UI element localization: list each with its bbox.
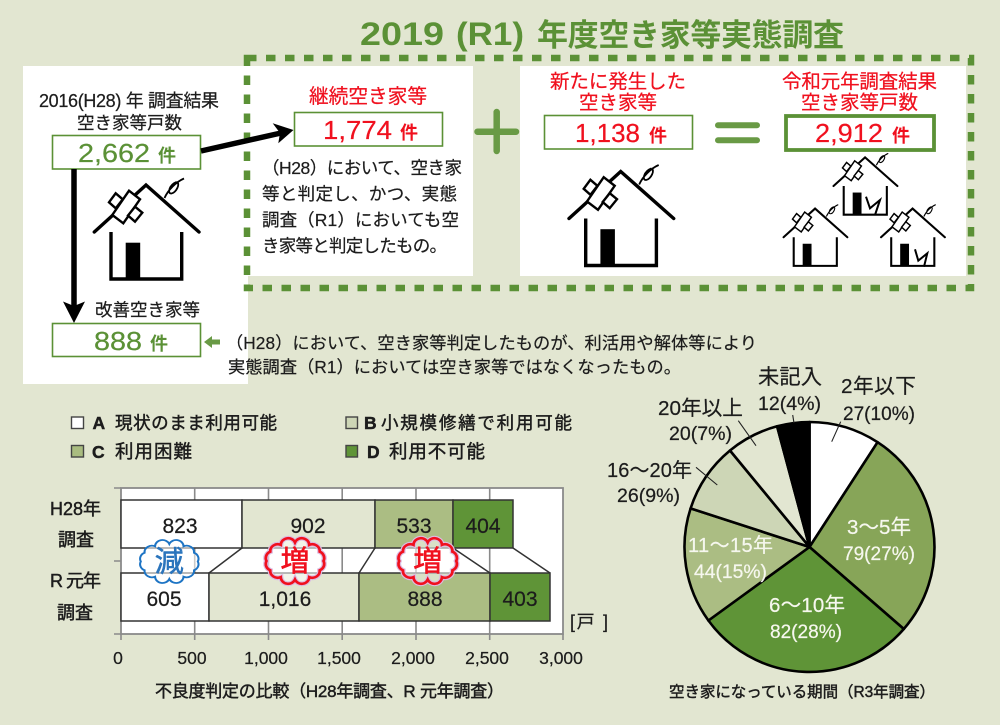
bars: H28 survey: [121, 500, 513, 548]
values: R1 survey: 1,016: [259, 588, 311, 611]
arrow: small green: [204, 336, 220, 348]
label: over 20 years: 20年以上: [658, 397, 743, 420]
connector lines: [209, 548, 550, 573]
slice: 2 years or less: [810, 422, 878, 547]
arrow: to improved vacant houses: [63, 169, 85, 323]
equals sign: [718, 125, 757, 140]
text: continued explanation: 等と判定し、かつ、実態: [262, 184, 457, 204]
title: 2019: [360, 16, 444, 52]
x axis labels: 2,500: [465, 648, 509, 668]
callout: increase: 増: [413, 545, 442, 578]
label: not stated: [758, 365, 822, 415]
slice: not stated: [777, 422, 810, 547]
unit label: [戸 ]: [570, 612, 608, 632]
chart caption: 不良度判定の比較（H28年調査、R 元年調査）: [155, 682, 504, 701]
legend item D: D: [367, 442, 380, 462]
legend item A: 現状のまま利用可能: [115, 413, 277, 433]
leader lines: [696, 415, 841, 485]
text: improved explanation: [226, 333, 757, 377]
box: 2,662: 2,662: [78, 138, 150, 168]
label: 3-5 years: 79(27%): [843, 544, 915, 565]
plus sign: [478, 112, 516, 151]
label: 2 years or less: 27(10%): [843, 404, 915, 425]
label: 11-15 years: 11～15年: [688, 534, 773, 557]
values: R1 survey: [146, 588, 538, 611]
text: continued explanation: [262, 158, 462, 256]
box: 2,912: [786, 116, 934, 150]
values: R1 survey: 888: [407, 588, 443, 611]
label: 16-20 years: 26(9%): [617, 486, 680, 507]
x axis labels: [113, 648, 583, 668]
legend item C: [72, 441, 192, 462]
box: 2,912: 件: [892, 126, 910, 146]
text: continued explanation: （H28）において、空き家: [262, 158, 462, 178]
label: 2 years or less: [841, 375, 916, 425]
title: 年度空き家等実態調査: [537, 18, 844, 53]
values: H28 survey: [162, 515, 501, 538]
y axis labels: R 元年: [50, 571, 101, 591]
y axis labels: 調査: [57, 603, 93, 623]
text: continued explanation: 調査（R1）においても空: [262, 210, 459, 230]
arrow: to continued vacant houses: [201, 123, 294, 151]
title: (R1): [456, 16, 524, 52]
pie caption: 空き家になっている期間（R3年調査）: [669, 683, 935, 701]
values: H28 survey: 404: [465, 515, 501, 538]
box: 2,662: 件: [158, 146, 176, 166]
legend: [72, 413, 572, 462]
label: 2 years or less: 2年以下: [841, 375, 916, 398]
label: 3-5 years: [843, 516, 915, 565]
block: newly appeared vacant houses: [544, 71, 692, 266]
panel: new and total vacant houses (white): [520, 66, 966, 276]
label: 6-10 years: [769, 594, 845, 643]
box: 888: [52, 324, 200, 356]
legend item D: [346, 441, 485, 462]
box: 888: 件: [150, 334, 168, 354]
y axis labels: 調査: [58, 530, 94, 550]
label: not stated: 12(4%): [758, 394, 821, 415]
text: improved explanation: （H28）において、空き家等判定したものが、利活用や解体等により: [226, 333, 757, 353]
legend item C: C: [92, 442, 105, 462]
label: newly appeared: [550, 71, 686, 114]
label: total vacant houses: 空き家等戸数: [801, 92, 918, 114]
callout: increase: 増: [280, 545, 310, 578]
block: 2016 survey heading: 空き家等戸数: [77, 113, 182, 133]
slice: over 20 years: [730, 426, 810, 547]
x axis labels: 3,000: [539, 648, 583, 668]
callout: increase: [398, 538, 457, 584]
x axis labels: 1,000: [244, 648, 288, 668]
label: 16-20 years: [607, 459, 692, 507]
box: 888: 888: [94, 326, 142, 356]
label: total vacant houses: 令和元年調査結果: [782, 71, 937, 93]
box: 2,912: 2,912: [815, 118, 883, 148]
y axis labels: [50, 499, 101, 623]
values: R1 survey: 403: [502, 588, 538, 611]
title: [360, 16, 844, 53]
text: improved explanation: 実態調査（R1）においては空き家等ではなくなったもの。: [228, 357, 681, 377]
x axis labels: 500: [177, 648, 207, 668]
legend item B: B: [364, 413, 377, 433]
label: 6-10 years: 6～10年: [769, 594, 845, 617]
values: H28 survey: 823: [162, 515, 198, 538]
values: H28 survey: 902: [290, 515, 326, 538]
legend item B: 小規模修繕で利用可能: [381, 413, 572, 433]
slice: 11-15 years: [684, 508, 810, 620]
icon: three vacant houses: [784, 153, 945, 267]
values: H28 survey: 533: [396, 515, 432, 538]
legend item D: 利用不可能: [389, 441, 485, 462]
label: over 20 years: [658, 397, 743, 445]
label: 11-15 years: 44(15%): [694, 562, 767, 583]
callout: decrease: 減: [155, 546, 184, 578]
box: 1,138: 1,138: [575, 118, 640, 148]
box: 1,138: 件: [649, 126, 667, 146]
text: continued explanation: き家等と判定したもの。: [262, 236, 447, 256]
label: total vacant houses: [782, 71, 937, 114]
panel: 2016 survey result (white): [23, 66, 473, 384]
box: 1,774: [294, 112, 442, 146]
label: 11-15 years: [688, 534, 773, 583]
slice: 3-5 years: [810, 442, 934, 629]
label: continued vacant houses: 継続空き家等: [309, 86, 427, 108]
callout: increase: [266, 538, 324, 584]
label: over 20 years: 20(7%): [669, 424, 732, 445]
block: total vacant houses: [782, 71, 945, 267]
box: 2,662: [52, 136, 200, 169]
block: 2016 survey heading: 2016(H28) 年 調査結果: [39, 91, 219, 111]
x axis labels: 2,000: [391, 648, 435, 668]
callout: decrease: [140, 540, 199, 583]
x axis labels: 1,500: [317, 648, 361, 668]
label: improved vacant houses: 改善空き家等: [95, 300, 200, 320]
block: 2016 survey heading: [39, 91, 219, 133]
label: 16-20 years: 16～20年: [607, 459, 692, 482]
legend item C: 利用困難: [115, 441, 192, 462]
values: R1 survey: 605: [146, 588, 182, 611]
slice: 6-10 years: [708, 547, 904, 672]
block: continued vacant houses: [262, 86, 462, 256]
bars: R1 survey: [121, 573, 550, 621]
label: newly appeared: 新たに発生した: [550, 71, 686, 93]
slice: 16-20 years: [691, 450, 810, 547]
y axis labels: H28年: [50, 499, 101, 519]
icon: vacant house: [569, 165, 674, 266]
label: newly appeared: 空き家等: [579, 92, 657, 114]
label: 3-5 years: 3～5年: [847, 516, 911, 539]
icon: vacant house: [94, 178, 199, 280]
legend item A: A: [92, 413, 106, 433]
box: 1,774: 件: [400, 123, 418, 143]
label: not stated: 未記入: [758, 365, 822, 389]
label: 6-10 years: 82(28%): [770, 622, 842, 643]
box: 1,138: [544, 116, 692, 149]
dashed frame: 2019 survey: [247, 58, 971, 288]
bar chart: condition comparison: [50, 488, 608, 668]
box: 1,774: 1,774: [323, 115, 392, 145]
pie chart: vacancy period: [607, 365, 934, 672]
x axis labels: 0: [113, 648, 123, 668]
